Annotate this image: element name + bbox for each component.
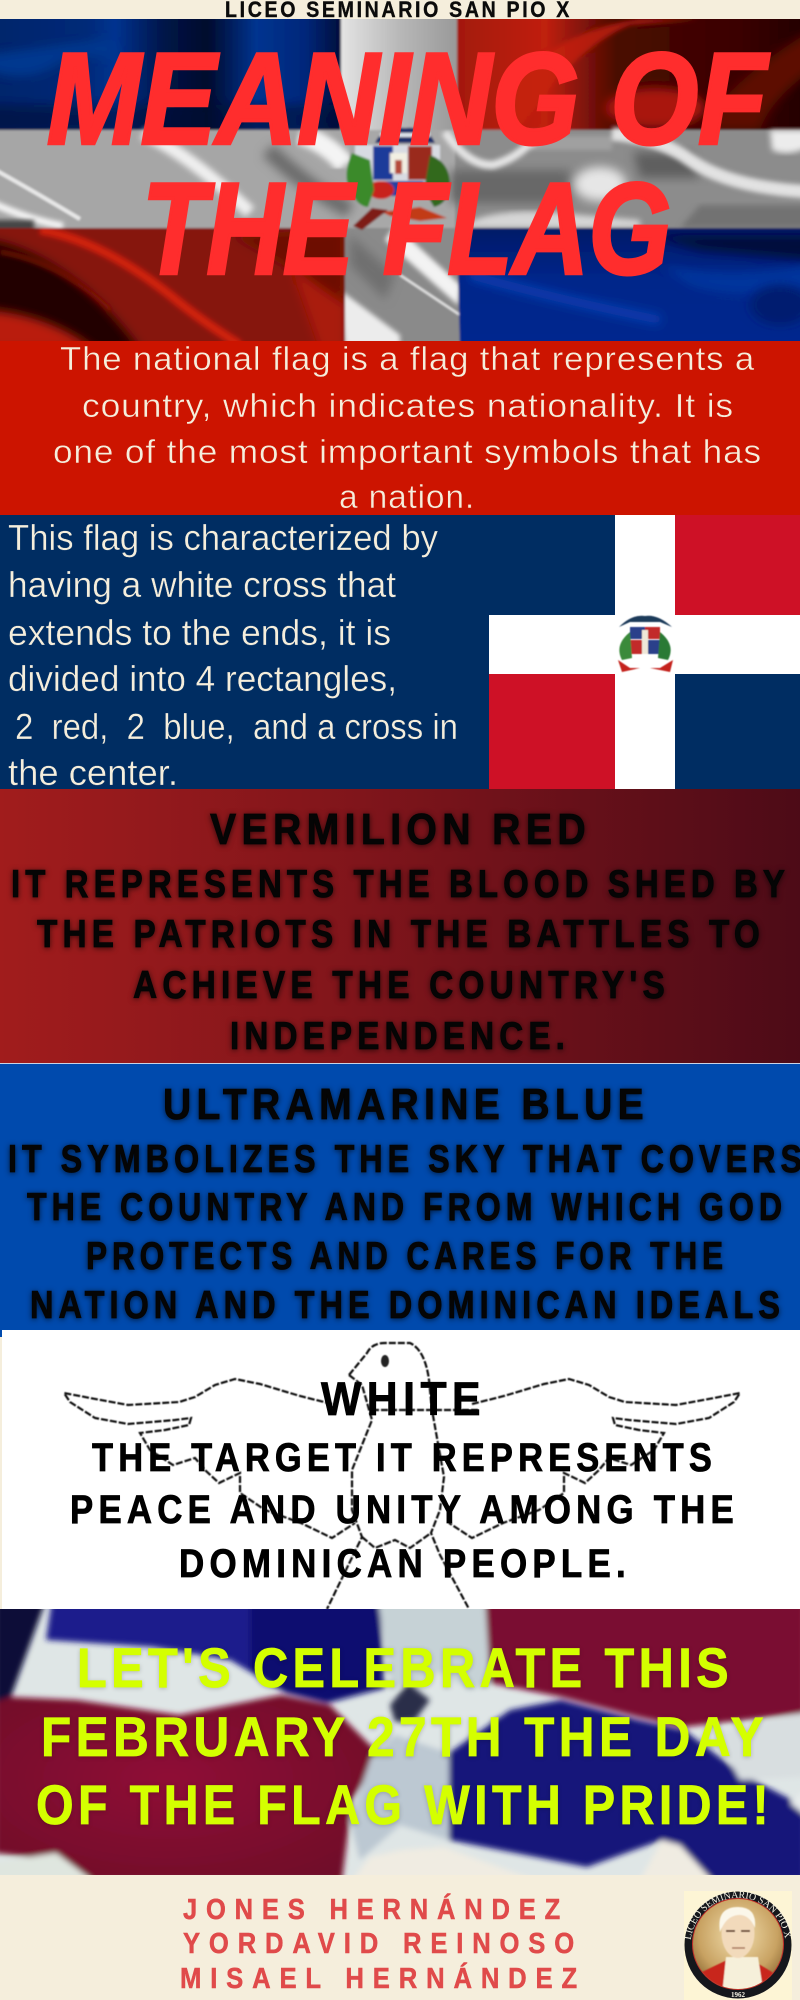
author names: JONES HERNÁNDEZ (183, 1892, 569, 1926)
description text: This flag is characterized by (8, 517, 438, 558)
white text (70, 1372, 739, 1586)
cross vertical (341, 5, 457, 130)
panel: ultramarine blue (0, 1064, 800, 1330)
description text: 2 red, 2 blue, and a cross in (15, 706, 458, 747)
definition text: one of the most important symbols that has (53, 433, 762, 470)
icon: dove outline (64, 1343, 740, 1609)
celebration text (36, 1637, 773, 1836)
ultramarine text (8, 1080, 800, 1327)
description text: extends to the ends, it is (8, 612, 391, 653)
panel: vermilion red (0, 789, 800, 1064)
left white band shading (0, 130, 345, 228)
vermilion text: VERMILION RED (210, 805, 591, 854)
right white band shading (455, 130, 800, 228)
definition text: country, which indicates nationality. It is (82, 387, 734, 424)
description text: the center. (8, 752, 178, 793)
panel: call to action with flag photo (0, 1600, 800, 1880)
author names: YORDAVID REINOSO (183, 1928, 583, 1960)
author names: MISAEL HERNÁNDEZ (180, 1961, 586, 1995)
title: MEANING OF THE FLAG (47, 26, 770, 302)
seal ring text: LICEO SEMINARIO SAN PIO X (684, 1892, 792, 1940)
panel: white (0, 1330, 800, 1609)
waving flag coat of arms (346, 128, 450, 230)
title: MEANING OF THE FLAG: THE FLAG (142, 156, 671, 302)
blurred flag background (0, 1600, 800, 1880)
white text: DOMINICAN PEOPLE. (179, 1542, 631, 1586)
vermilion text (11, 805, 790, 1058)
description text: having a white cross that (8, 564, 396, 605)
school seal (684, 1892, 792, 1999)
author names (180, 1892, 586, 1995)
vermilion text: INDEPENDENCE. (230, 1015, 570, 1058)
coat of arms (618, 616, 673, 672)
footer (180, 1892, 792, 1999)
school seal: 1962 (731, 1991, 746, 1999)
waving flag background (0, 5, 800, 355)
ultramarine text: ULTRAMARINE BLUE (163, 1080, 649, 1129)
Dominican flag (489, 515, 800, 789)
definition text: a nation. (339, 478, 475, 515)
school name header (0, 0, 800, 22)
seal portrait (702, 1906, 773, 1989)
panel: national flag definition (0, 340, 800, 515)
definition text (53, 340, 762, 515)
definition text: The national flag is a flag that represents a (60, 340, 755, 377)
white text: THE TARGET IT REPRESENTS (92, 1436, 717, 1480)
panel: flag description (0, 515, 800, 793)
description text: divided into 4 rectangles, (8, 658, 397, 699)
vermilion text: ACHIEVE THE COUNTRY'S (133, 964, 670, 1007)
description text (8, 517, 458, 793)
hero panel: waving flag with title (0, 5, 800, 355)
white text: WHITE (321, 1372, 486, 1425)
